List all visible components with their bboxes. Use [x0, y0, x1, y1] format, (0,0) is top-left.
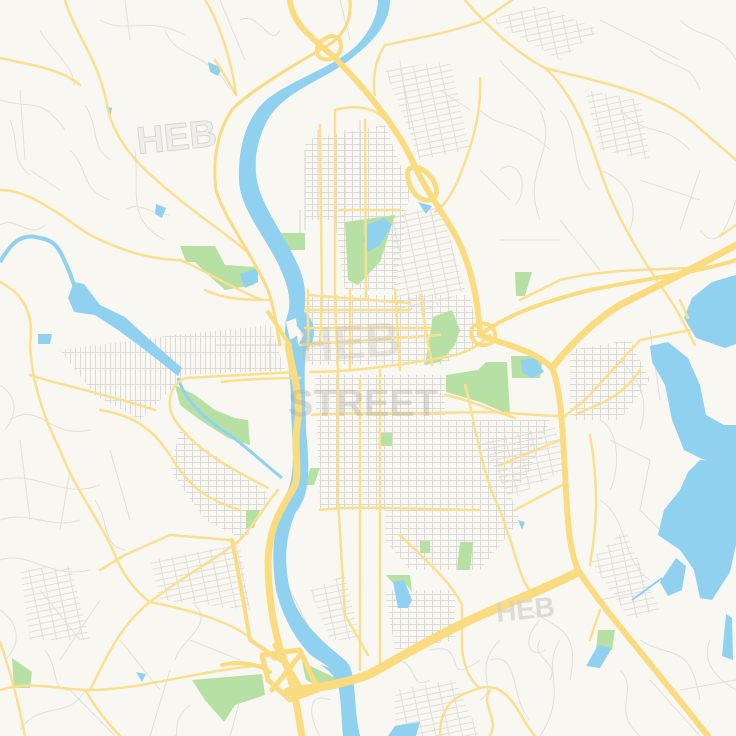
pond: far southeast [722, 614, 733, 660]
interchange: west [222, 312, 290, 672]
park: by river south [302, 662, 340, 686]
park: riverside west [175, 385, 250, 445]
highway: east spur [552, 245, 736, 368]
lake: northeast [684, 275, 736, 348]
park: downtown east [425, 310, 460, 365]
park: south east [596, 630, 615, 650]
lake: southeast channel [660, 558, 686, 596]
parks [12, 215, 615, 722]
highway: second carriageway [215, 0, 350, 345]
park: south west [192, 674, 265, 722]
lake: west elongated [68, 282, 182, 376]
highway: river west [268, 345, 302, 736]
park: far south west [12, 658, 32, 688]
watermark: bottom right: HEB [494, 591, 556, 628]
lake: east big [650, 342, 736, 462]
park: pond edge [386, 575, 412, 592]
ponds: small [208, 62, 222, 76]
watermarks [135, 113, 556, 628]
park: east small [511, 356, 543, 378]
highways [215, 0, 736, 736]
interchange: northwest [317, 36, 341, 59]
park: south central [457, 542, 473, 570]
park: west hills [180, 246, 258, 290]
interchange: north [408, 167, 436, 200]
park: east central [446, 362, 510, 415]
park: central north [345, 215, 395, 285]
park: north strip [278, 233, 305, 250]
pond: southeast [586, 645, 612, 668]
river islands [286, 318, 330, 668]
river: west tributary [0, 237, 80, 295]
lake: east lower [658, 460, 736, 600]
river: main [239, 0, 390, 736]
park: northeast [515, 272, 532, 296]
pond: south central [393, 580, 412, 608]
highway: north-south east loop [290, 0, 708, 736]
watermark: centre bottom: STREET [288, 383, 438, 425]
lake: in central park [363, 218, 392, 252]
interchange: east [471, 323, 495, 345]
river: west lower [178, 378, 282, 478]
watermark: centre top: HEB [297, 313, 402, 373]
interchange: south [262, 650, 318, 700]
park: small south [420, 541, 430, 553]
pond: east park [521, 358, 544, 378]
highway: south connector [288, 572, 578, 692]
watermark: top left: HEB [135, 113, 219, 163]
